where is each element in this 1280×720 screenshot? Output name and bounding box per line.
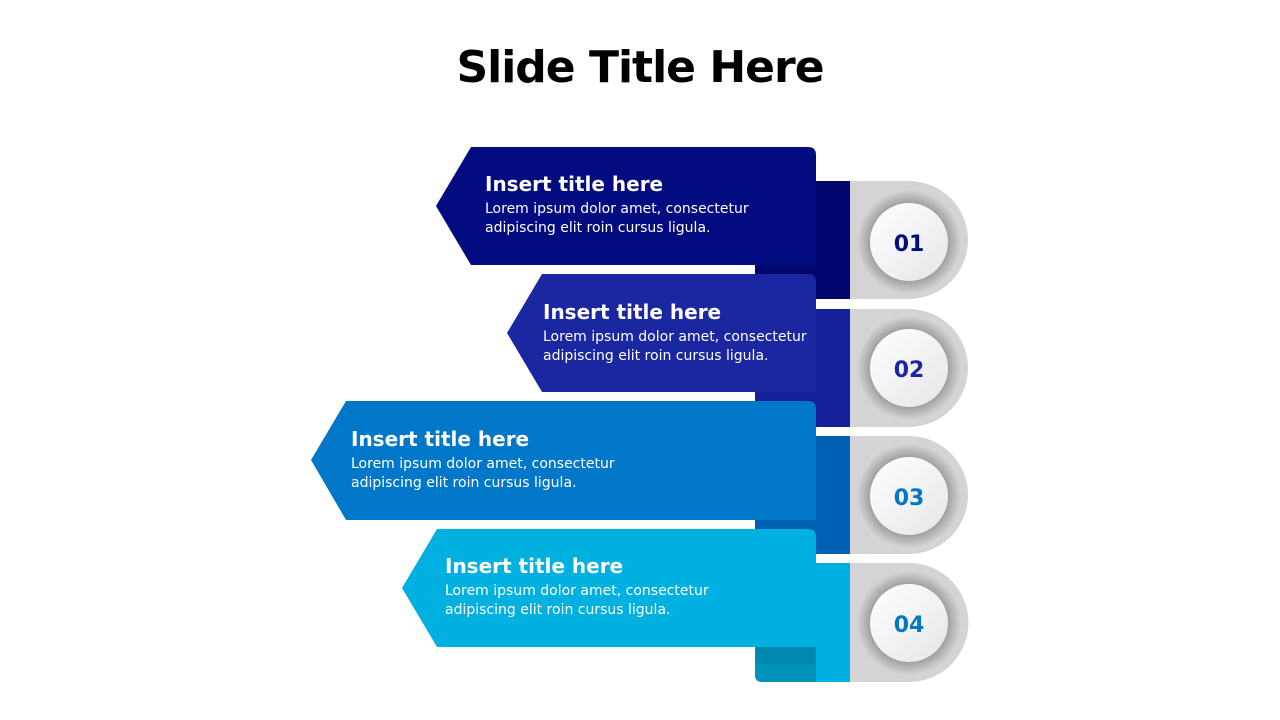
fold 4: [755, 647, 816, 664]
arrow 4: [402, 529, 816, 647]
text 2: adipiscing elit roin cursus ligula.: [543, 348, 768, 364]
text 1: adipiscing elit roin cursus ligula.: [485, 220, 710, 236]
title: Slide Title Here: [456, 42, 824, 93]
row 2 tab: 02: [894, 358, 924, 383]
text 4: Insert title here: [445, 554, 623, 578]
row 1 tab: [755, 181, 968, 299]
text 2: Insert title here: [543, 300, 721, 324]
text 1: Lorem ipsum dolor amet, consectetur: [485, 201, 749, 217]
text 3: Lorem ipsum dolor amet, consectetur: [351, 456, 615, 472]
arrow 2: [507, 274, 816, 392]
row 4 tab: [755, 563, 968, 682]
text 4: [445, 554, 709, 618]
text 2: Lorem ipsum dolor amet, consectetur: [543, 329, 807, 345]
row 3 tab: [755, 436, 968, 554]
text 3: [351, 427, 615, 491]
text 3: adipiscing elit roin cursus ligula.: [351, 475, 576, 491]
text 3: Insert title here: [351, 427, 529, 451]
row 4 tab: 04: [894, 613, 924, 638]
text 2: [543, 300, 807, 364]
text 1: Insert title here: [485, 172, 663, 196]
text 1: [485, 172, 749, 236]
row 3 tab: 03: [894, 486, 924, 511]
arrow 1: [436, 147, 816, 265]
text 4: Lorem ipsum dolor amet, consectetur: [445, 583, 709, 599]
text 4: adipiscing elit roin cursus ligula.: [445, 602, 670, 618]
row 2 tab: [755, 309, 968, 427]
row 1 tab: 01: [894, 232, 924, 257]
arrow 3: [311, 401, 816, 520]
